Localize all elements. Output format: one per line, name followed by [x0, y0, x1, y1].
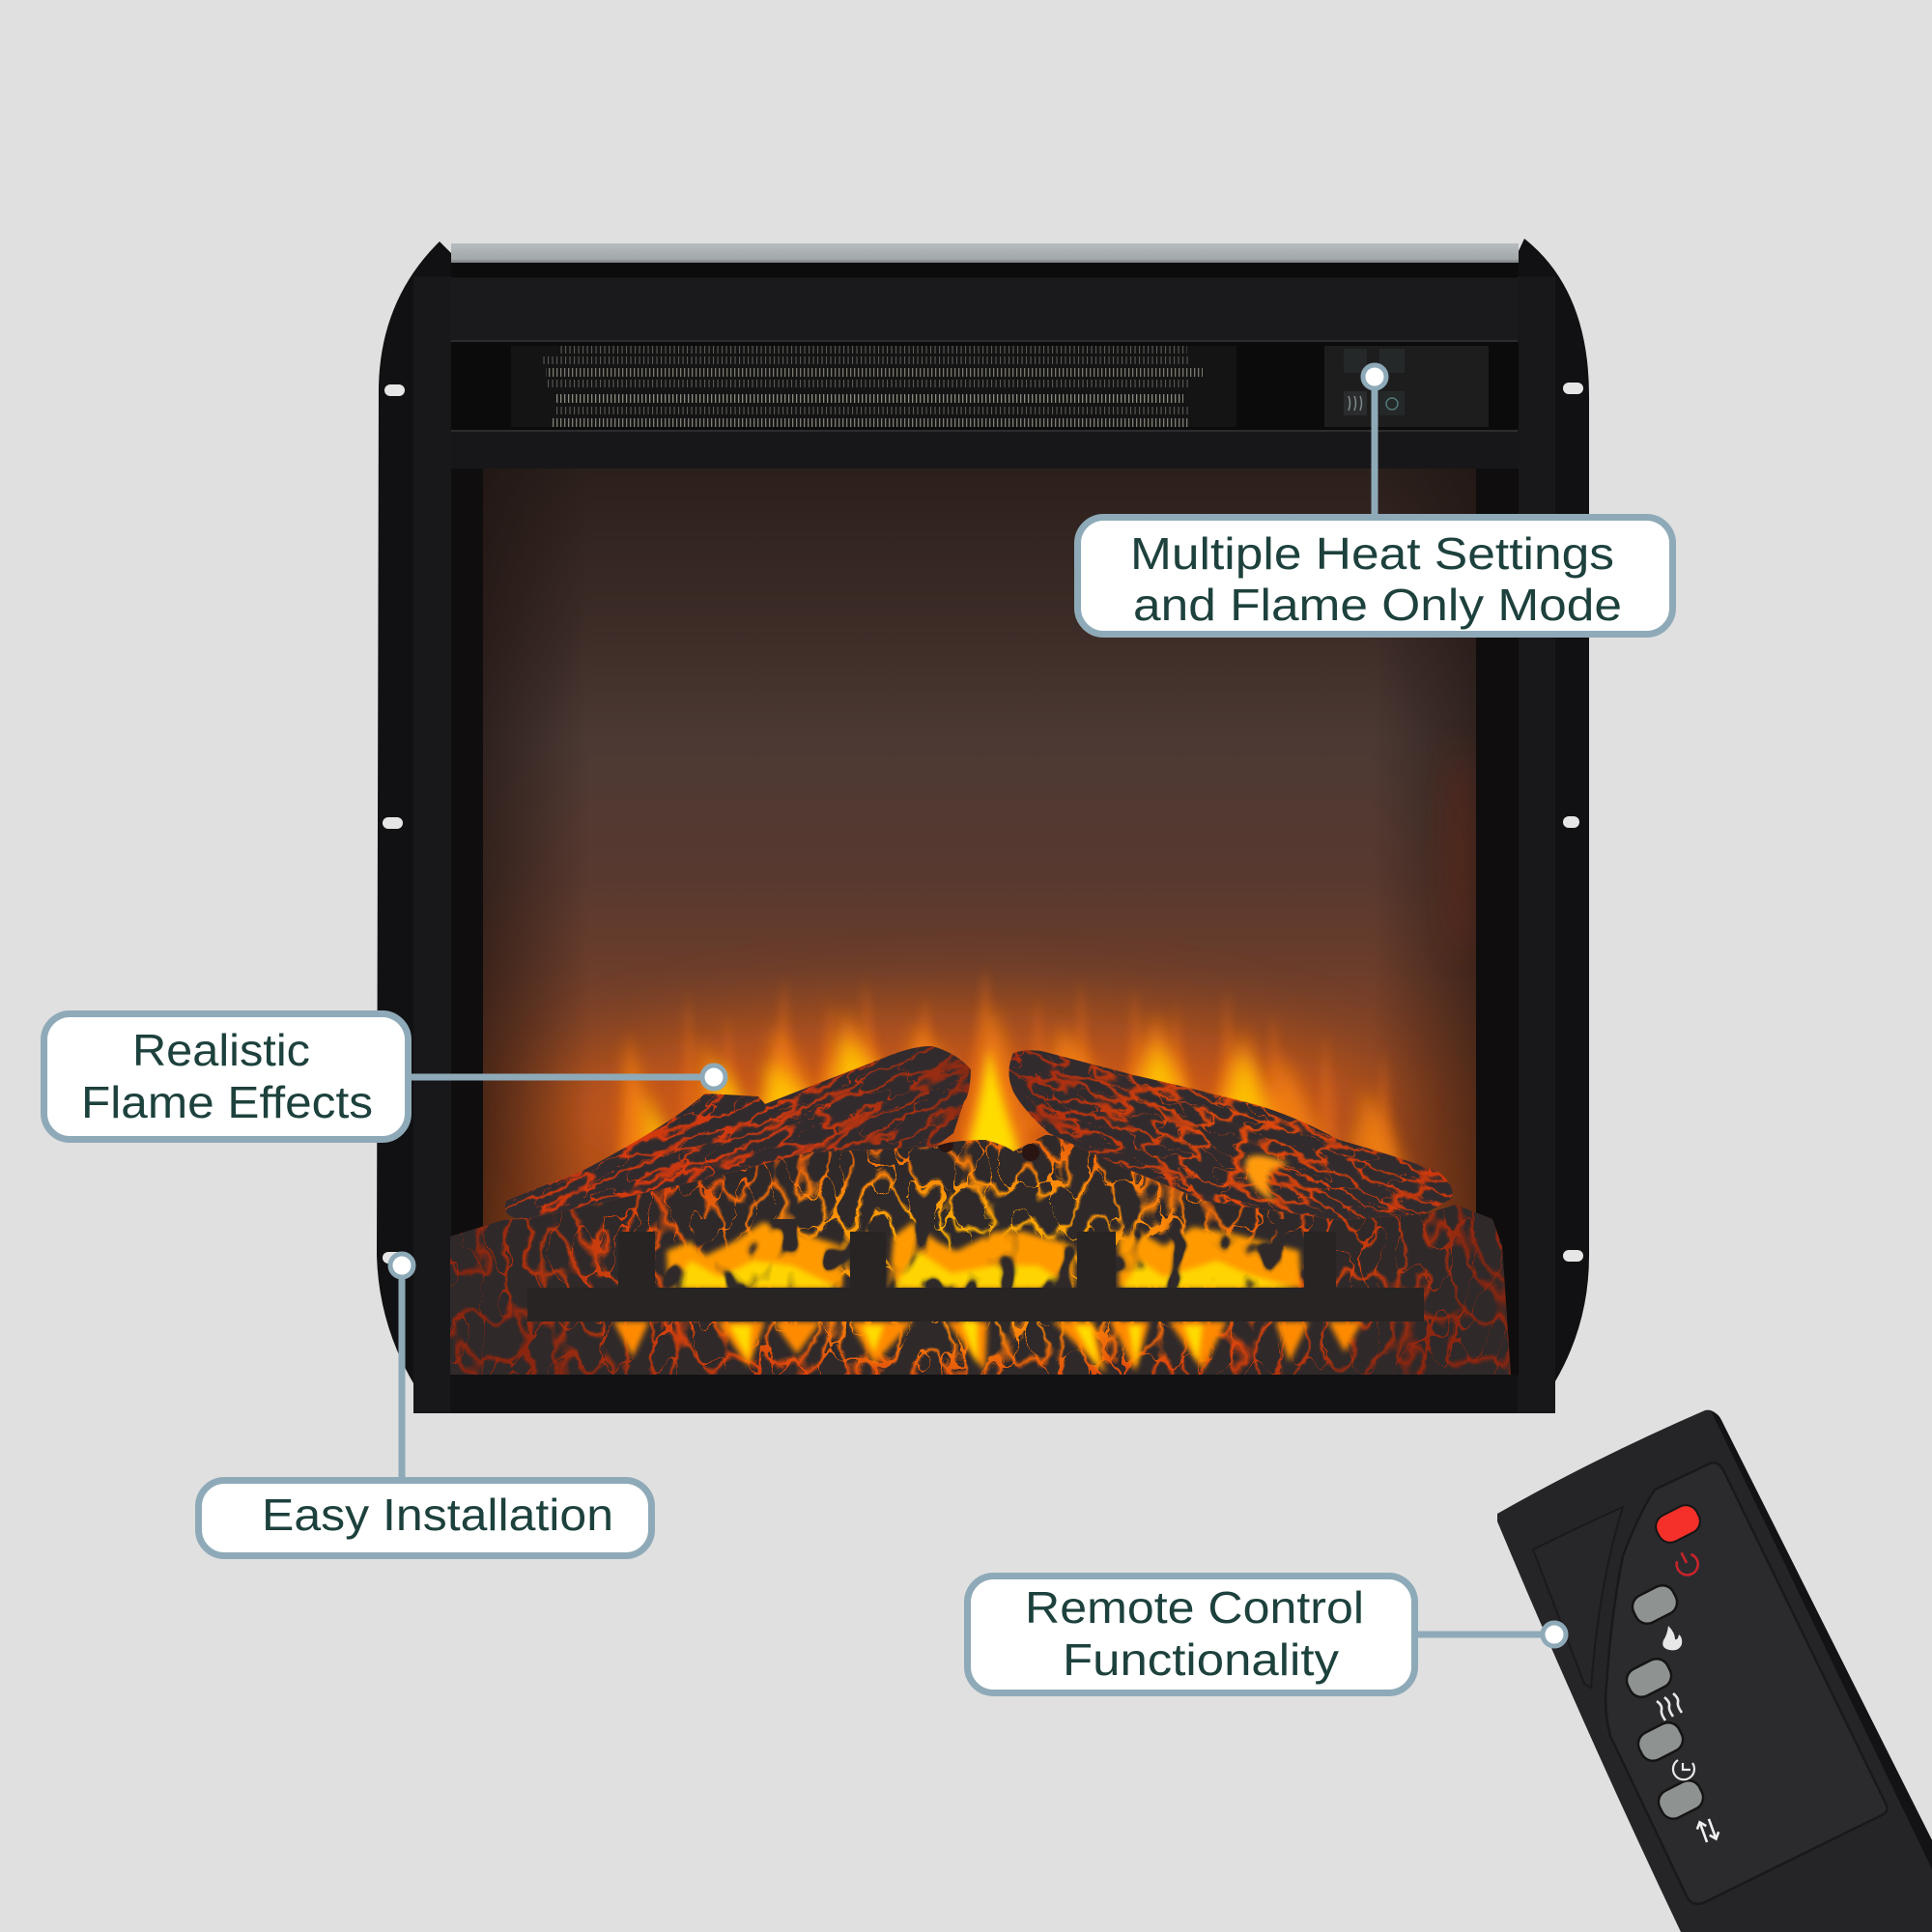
flames	[612, 976, 1410, 1161]
grey buttons	[1622, 1581, 1708, 1823]
heat waves icon	[1657, 1693, 1682, 1720]
leader dot	[1363, 365, 1386, 388]
label text: and Flame Only Mode	[1133, 580, 1622, 630]
mounting flange	[377, 239, 1589, 1383]
bottom rail	[450, 1375, 1518, 1413]
flame icon	[1662, 1626, 1682, 1650]
leader dot	[702, 1065, 725, 1089]
callout: realistic flame effects	[44, 1014, 725, 1140]
front frame	[413, 276, 1555, 1413]
timer icon	[1673, 1760, 1694, 1779]
power button	[1652, 1501, 1704, 1547]
power icon	[1672, 1548, 1701, 1578]
leader line	[410, 1074, 703, 1080]
label box	[968, 1577, 1414, 1692]
remote body	[1497, 1410, 1932, 1932]
callout: easy installation	[199, 1254, 651, 1555]
battery recess	[1533, 1507, 1623, 1688]
leader line	[1372, 386, 1378, 516]
callout: multiple heat settings	[1078, 365, 1673, 634]
label text: Easy Installation	[262, 1490, 613, 1540]
label box	[44, 1014, 408, 1140]
label text	[81, 1025, 373, 1127]
mounting holes	[383, 383, 1583, 1264]
leader dot	[1543, 1623, 1566, 1646]
label box	[199, 1480, 651, 1555]
steel top strip	[451, 243, 1519, 263]
leader line	[1415, 1631, 1544, 1638]
glowing windows between grate prongs	[657, 1219, 1304, 1288]
label text: Flame Effects	[81, 1077, 373, 1127]
label box	[1078, 518, 1673, 634]
label text	[1130, 528, 1622, 630]
label text: Functionality	[1063, 1634, 1339, 1685]
button panel	[1605, 1463, 1887, 1904]
leader line	[398, 1275, 406, 1479]
lower embers	[613, 1321, 1362, 1374]
fireplace insert	[377, 239, 1593, 1413]
label text: Multiple Heat Settings	[1130, 528, 1614, 579]
label text: Realistic	[132, 1025, 310, 1075]
callout: remote control functionality	[968, 1577, 1566, 1692]
ember pile	[444, 1135, 1517, 1381]
remote control	[1497, 1410, 1932, 1932]
right log	[1009, 1050, 1453, 1220]
leader dot	[390, 1254, 413, 1277]
heater recess and grille	[451, 342, 1519, 430]
heat control panel	[1324, 346, 1489, 427]
left log	[505, 1046, 971, 1219]
firebox back wall	[451, 469, 1519, 1377]
log support knots	[938, 1142, 953, 1152]
label text	[1025, 1582, 1364, 1685]
log grate	[527, 1232, 1424, 1321]
up down arrows icon	[1695, 1817, 1720, 1844]
label text: Remote Control	[1025, 1582, 1364, 1633]
